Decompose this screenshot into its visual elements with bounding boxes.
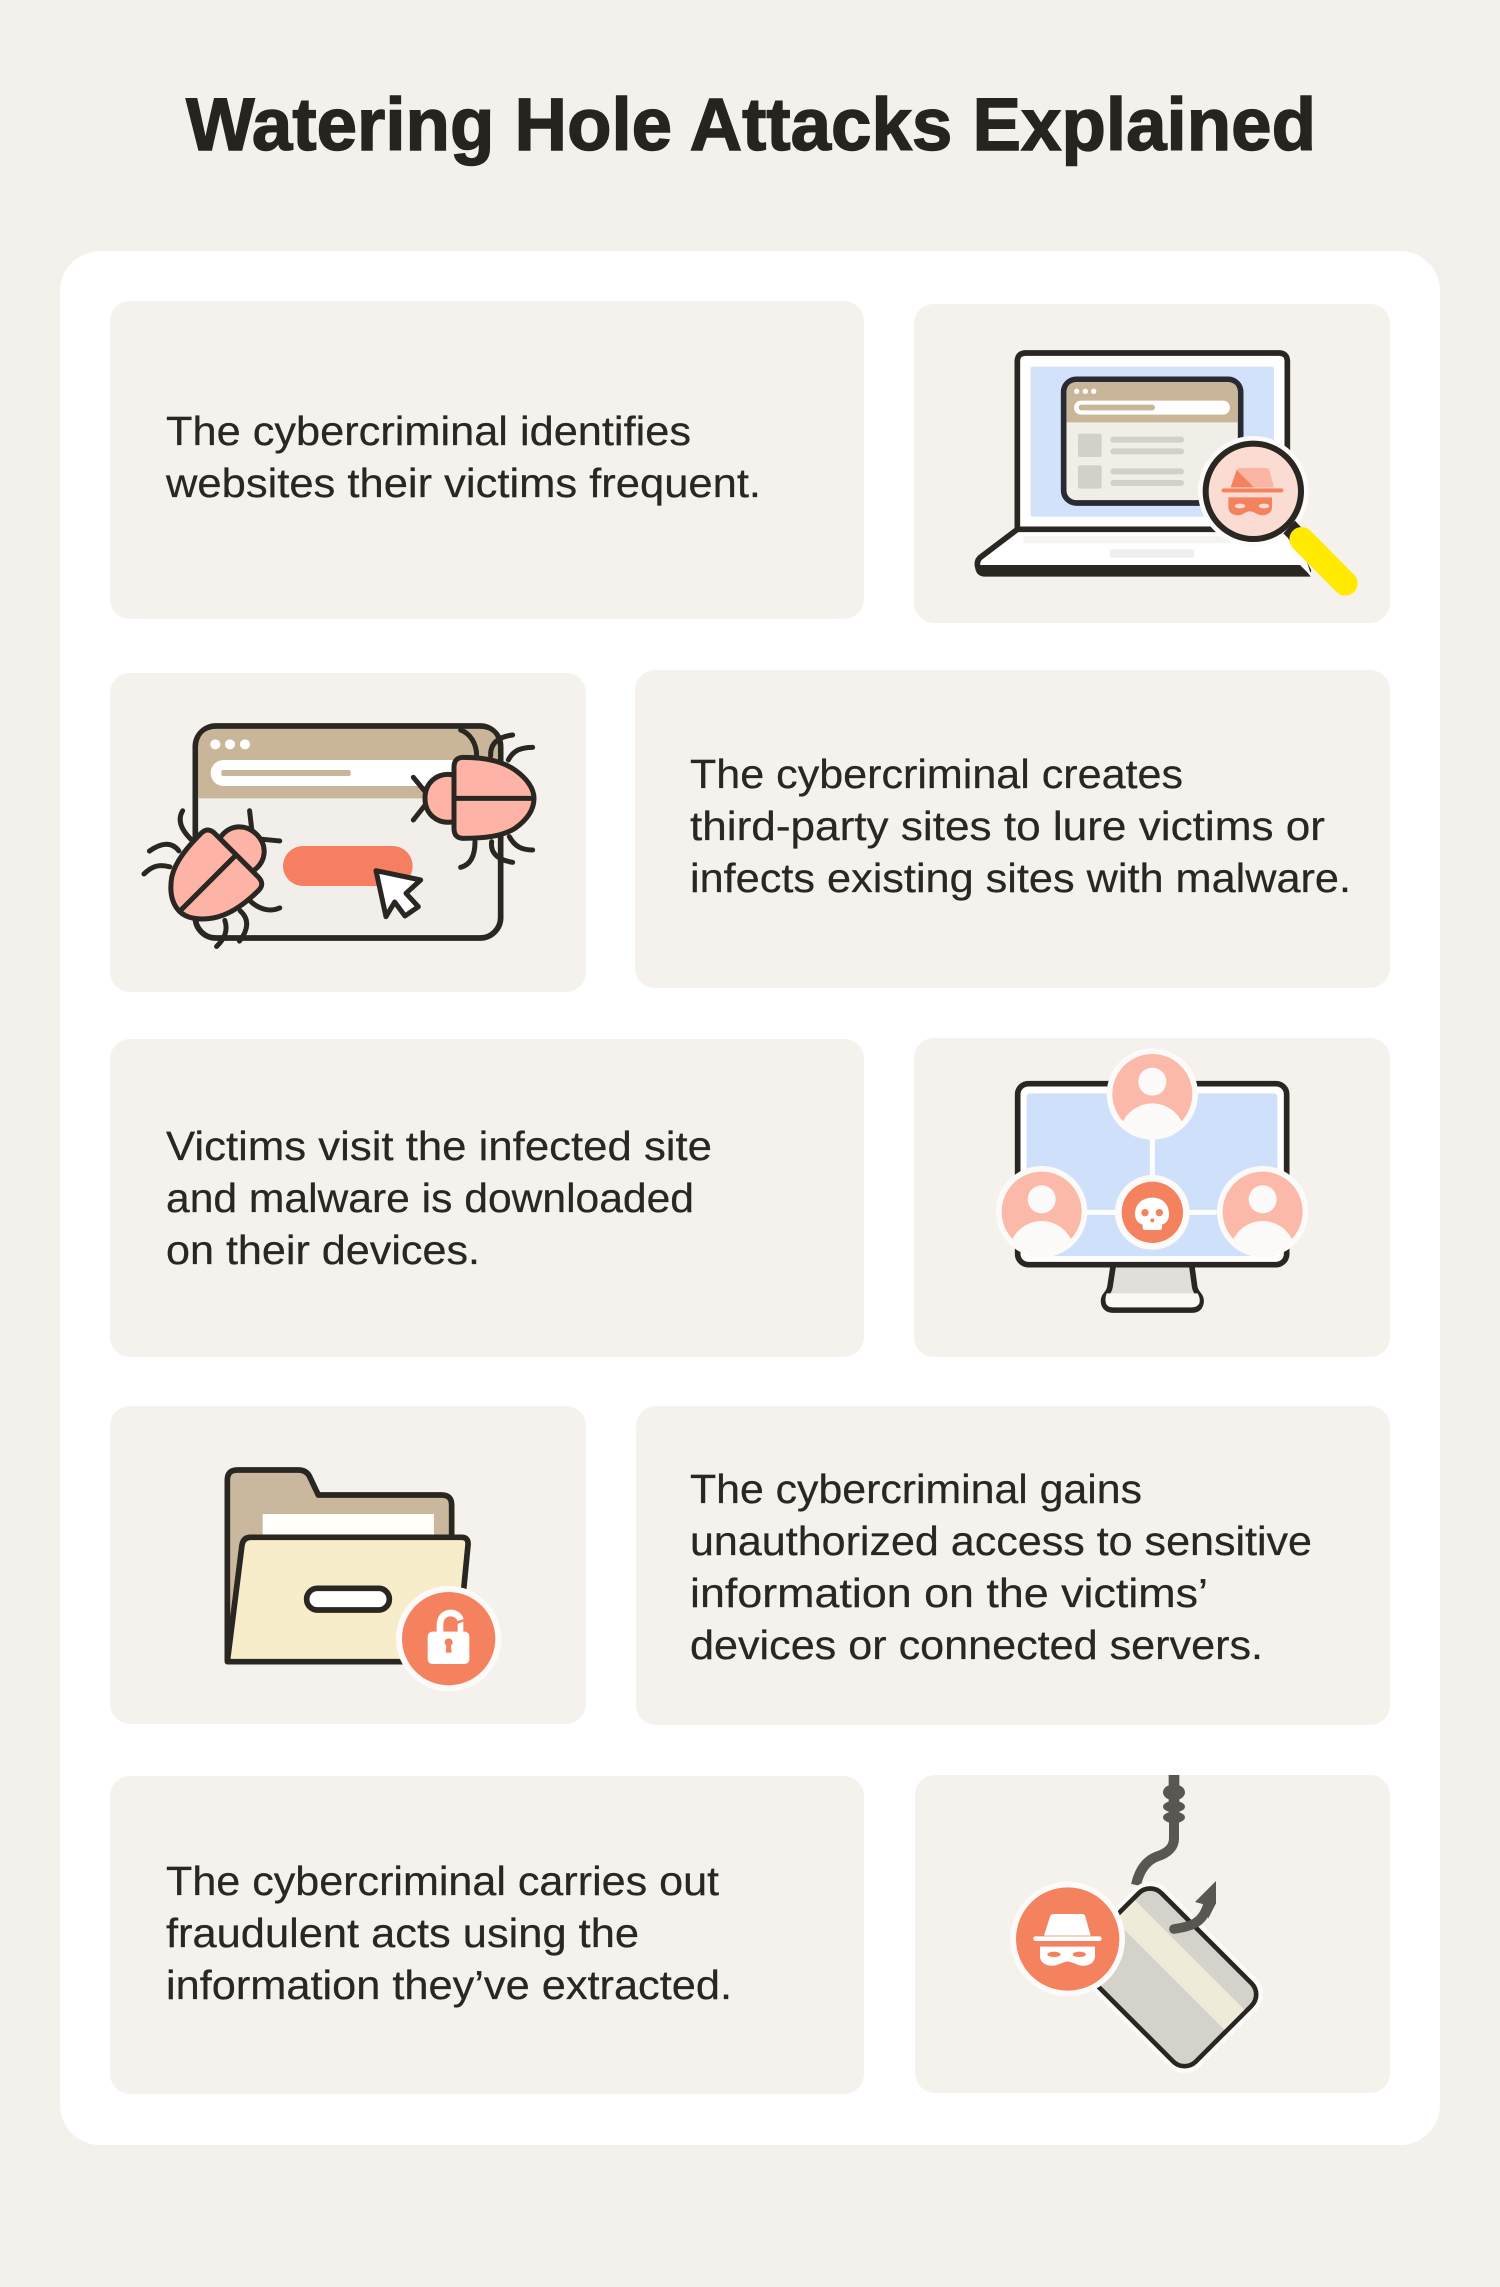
step 5 text card: information they’ve extracted. (166, 1962, 732, 2008)
icon: bug right (413, 730, 534, 867)
step 4 text card (636, 1406, 1390, 1725)
step 1 text card: The cybercriminal identifies (166, 408, 691, 454)
icon: skull (1115, 1175, 1190, 1250)
step 4 text card: The cybercriminal gains (690, 1466, 1142, 1512)
step 3 illustration card: monitor and connected users (914, 1038, 1390, 1357)
step 3 text card (110, 1039, 864, 1357)
step 2 text card: The cybercriminal creates (690, 751, 1183, 797)
icon: hacker badge (1010, 1882, 1125, 1996)
step 3 text card: and malware is downloaded (166, 1175, 694, 1221)
icon: fishing hook (1136, 1775, 1185, 1885)
step 5 illustration card: phishing hook and credit card (915, 1775, 1390, 2093)
step 5 text card: fraudulent acts using the (166, 1910, 639, 1956)
panel: steps (60, 251, 1440, 2145)
step 1 text card (110, 301, 864, 619)
icon: credit card (1072, 1882, 1263, 2073)
step 2 text card: infects existing sites with malware. (690, 855, 1351, 901)
step 4 text card: devices or connected servers. (690, 1622, 1263, 1668)
step 4 text card: information on the victims’ (690, 1570, 1208, 1616)
step 1 illustration card: laptop and magnifier (914, 304, 1390, 623)
step 5 text card (110, 1776, 864, 2094)
step 3 text card: Victims visit the infected site (166, 1123, 712, 1169)
icon: open padlock (396, 1586, 501, 1691)
step 3 text card: on their devices. (166, 1227, 480, 1273)
icon: cursor (376, 871, 421, 917)
user avatar right (1217, 1166, 1308, 1256)
user avatar left (996, 1166, 1088, 1256)
step 5 text card: The cybercriminal carries out (166, 1858, 720, 1904)
title: Watering Hole Attacks Explained (186, 83, 1316, 166)
step 2 illustration card: infected browser and bugs (110, 673, 586, 992)
user avatar top (1106, 1048, 1198, 1140)
icon: hook barb (1174, 1881, 1216, 1929)
step 4 illustration card: folder and open lock (110, 1406, 586, 1724)
step 2 text card: third-party sites to lure victims or (690, 803, 1325, 849)
step 1 text card: websites their victims frequent. (165, 460, 761, 506)
step 4 text card: unauthorized access to sensitive (690, 1518, 1312, 1564)
step 2 text card (635, 670, 1390, 988)
icon: bug left (131, 777, 313, 960)
